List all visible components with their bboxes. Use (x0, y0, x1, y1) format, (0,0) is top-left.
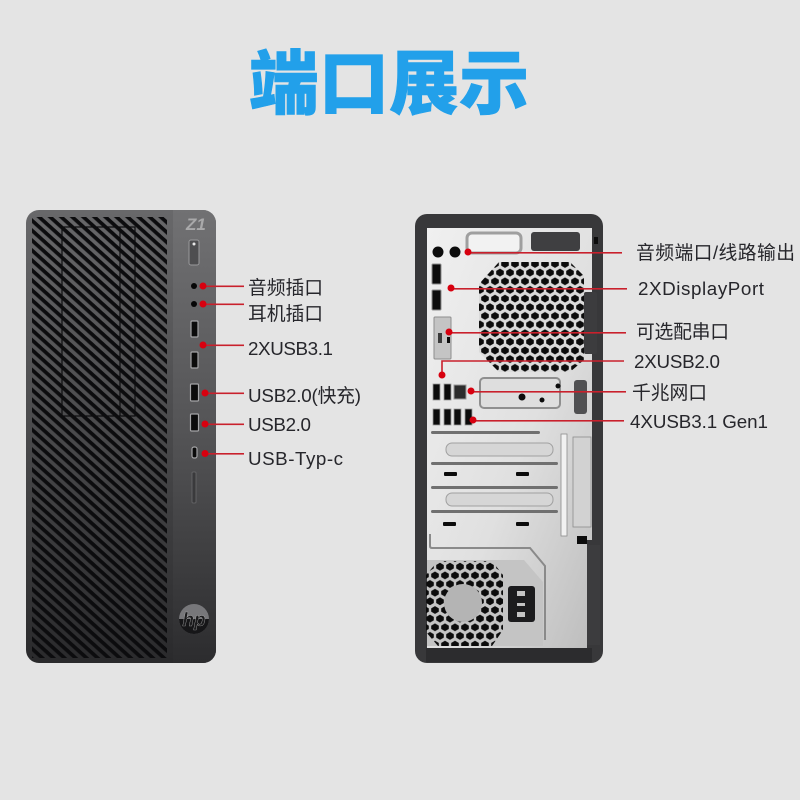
top dark cover (531, 232, 580, 251)
rear silver plate (427, 228, 592, 648)
rear port labels: 可选配串口 (636, 321, 729, 342)
center recessed panel (480, 378, 560, 408)
rear bracket handle (467, 233, 521, 253)
front port labels: USB2.0 (248, 414, 311, 435)
panel: rear view of tower (415, 214, 603, 663)
ethernet port (454, 385, 466, 399)
fan grille (479, 262, 584, 372)
hp logo (179, 604, 209, 634)
title: 端口展示 (249, 28, 529, 129)
DisplayPort connectors (432, 264, 441, 310)
rear audio jacks (432, 246, 460, 258)
front port labels: USB-Typ-c (248, 448, 343, 469)
rear port labels: 4XUSB3.1 Gen1 (630, 411, 768, 432)
front port labels: 2XUSB3.1 (248, 338, 333, 359)
lower dark side edge (587, 545, 600, 645)
front grille (32, 217, 167, 658)
rear chassis (415, 214, 603, 663)
front port labels: 音频插口 (248, 277, 323, 298)
power button (189, 240, 199, 265)
power socket (508, 586, 535, 622)
card slot (192, 472, 196, 503)
front control strip (173, 210, 216, 663)
rear port labels: 2XUSB2.0 (634, 351, 720, 372)
side latch (584, 292, 597, 354)
rear port labels: 音频端口/线路输出 (636, 242, 795, 263)
rear USB 3.1 ports (433, 409, 472, 425)
vertical card retainer (561, 434, 591, 544)
expansion slots (430, 431, 558, 640)
front chassis (26, 210, 216, 663)
rear port labels (630, 242, 795, 432)
hp logo: hp (182, 610, 206, 631)
panel: front view of tower (26, 210, 216, 663)
Z1 logo: Z1 (185, 215, 206, 234)
front port labels: USB2.0(快充) (248, 385, 361, 406)
front port labels: 耳机插口 (248, 303, 323, 324)
optional serial port plate (434, 317, 451, 359)
front port labels (248, 277, 361, 469)
lock slot (594, 237, 598, 244)
PSU fan grille (426, 561, 503, 646)
rear port labels: 千兆网口 (632, 382, 707, 403)
audio jacks (191, 283, 197, 307)
PSU plate (427, 560, 543, 646)
rear port labels: 2XDisplayPort (638, 278, 765, 299)
front callout lines (200, 282, 244, 457)
dark side block (574, 380, 587, 414)
rear callout lines (438, 248, 627, 424)
rear USB 2.0 ports (433, 384, 451, 400)
front USB ports (190, 321, 198, 458)
bottom bar (426, 648, 592, 662)
